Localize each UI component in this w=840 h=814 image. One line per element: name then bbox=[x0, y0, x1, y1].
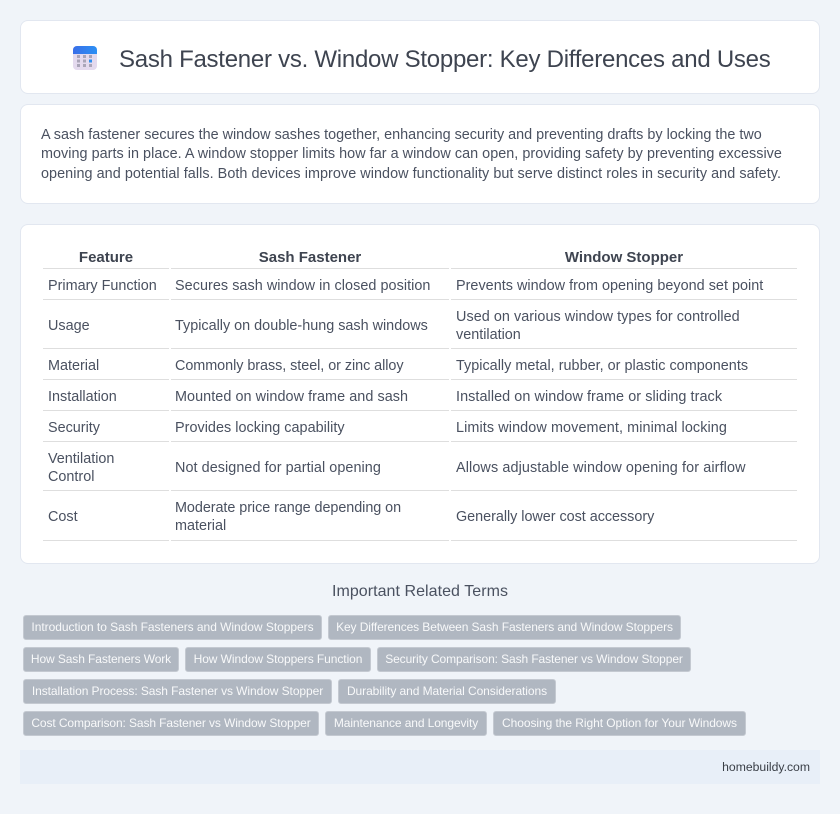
row: security: Limits window movement, minimal locking bbox=[456, 420, 727, 436]
row: primary function: Primary Function bbox=[48, 278, 157, 294]
row: security bbox=[43, 420, 797, 442]
tag bbox=[185, 647, 371, 672]
title: Sash Fastener vs. Window Stopper: Key Differences and Uses bbox=[119, 46, 770, 73]
intro line 1: A sash fastener secures the window sashes together, enhancing security and preventing drafts by locking the two bbox=[41, 127, 762, 143]
tag: Choosing the Right Option for Your Windows bbox=[502, 716, 737, 730]
tag: Key Differences Between Sash Fasteners and Window Stoppers bbox=[336, 620, 673, 634]
tag: Durability and Material Considerations bbox=[347, 684, 547, 698]
panel: intro text bbox=[20, 104, 820, 204]
tag bbox=[23, 679, 332, 704]
intro line 3: opening and potential falls. Both devices improve window functionality but serve distinct roles in security and safety. bbox=[41, 166, 781, 182]
row: material bbox=[43, 358, 797, 380]
intro line 2: moving parts in place. A window stopper limits how far a window can open, providing safety by preventing excessive bbox=[41, 146, 782, 162]
tag bbox=[328, 615, 681, 640]
row: material: Material bbox=[48, 358, 99, 374]
row: security: Security bbox=[48, 420, 100, 436]
tag bbox=[23, 647, 179, 672]
tag bbox=[23, 711, 319, 736]
footer source: homebuildy.com bbox=[722, 760, 810, 774]
row: ventilation control: Ventilation bbox=[48, 451, 114, 467]
row: usage: Typically on double-hung sash windows bbox=[175, 318, 428, 334]
heading: important related terms: Important Related Terms bbox=[332, 583, 508, 600]
tag bbox=[325, 711, 487, 736]
tag: Installation Process: Sash Fastener vs Window Stopper bbox=[32, 684, 323, 698]
table header: Feature bbox=[79, 249, 133, 266]
tag bbox=[377, 647, 691, 672]
row: cost: material bbox=[175, 518, 226, 534]
row: ventilation control: Control bbox=[48, 469, 94, 485]
tag bbox=[493, 711, 746, 736]
row: ventilation control: Allows adjustable window opening for airflow bbox=[456, 460, 746, 476]
row: primary function: Secures sash window in closed position bbox=[175, 278, 430, 294]
row: installation: Mounted on window frame and sash bbox=[175, 389, 408, 405]
row: usage: Usage bbox=[48, 318, 90, 334]
row: ventilation control: Not designed for partial opening bbox=[175, 460, 381, 476]
tag bbox=[23, 615, 322, 640]
tag bbox=[338, 679, 556, 704]
row: security: Provides locking capability bbox=[175, 420, 345, 436]
row: cost: Moderate price range depending on bbox=[175, 500, 401, 516]
row: usage: ventilation bbox=[456, 327, 521, 343]
row: installation bbox=[43, 389, 797, 411]
row: cost: Generally lower cost accessory bbox=[456, 509, 654, 525]
table header: Window Stopper bbox=[565, 249, 683, 266]
row: material: Commonly brass, steel, or zinc alloy bbox=[175, 358, 404, 374]
row: installation: Installation bbox=[48, 389, 117, 405]
tag: Security Comparison: Sash Fastener vs Window Stopper bbox=[385, 652, 683, 666]
row: ventilation control bbox=[43, 451, 797, 491]
row: primary function: Prevents window from opening beyond set point bbox=[456, 278, 763, 294]
row: usage bbox=[43, 309, 797, 349]
row: cost: Cost bbox=[48, 509, 78, 525]
row: primary function bbox=[43, 278, 797, 300]
icon: calendar bbox=[73, 46, 97, 70]
tag: How Sash Fasteners Work bbox=[31, 652, 171, 666]
row: cost bbox=[43, 500, 797, 541]
table header bbox=[43, 249, 797, 269]
row: usage: Used on various window types for controlled bbox=[456, 309, 740, 325]
row: material: Typically metal, rubber, or plastic components bbox=[456, 358, 748, 374]
related terms tags bbox=[23, 615, 746, 736]
tag: How Window Stoppers Function bbox=[194, 652, 362, 666]
footer bar bbox=[20, 750, 820, 784]
row: installation: Installed on window frame or sliding track bbox=[456, 389, 722, 405]
panel: comparison table bbox=[20, 224, 820, 564]
tag: Maintenance and Longevity bbox=[334, 716, 478, 730]
table header: Sash Fastener bbox=[259, 249, 361, 266]
tag: Introduction to Sash Fasteners and Window Stoppers bbox=[31, 620, 314, 634]
panel: title header bbox=[20, 20, 820, 94]
tag: Cost Comparison: Sash Fastener vs Window Stopper bbox=[31, 716, 311, 730]
